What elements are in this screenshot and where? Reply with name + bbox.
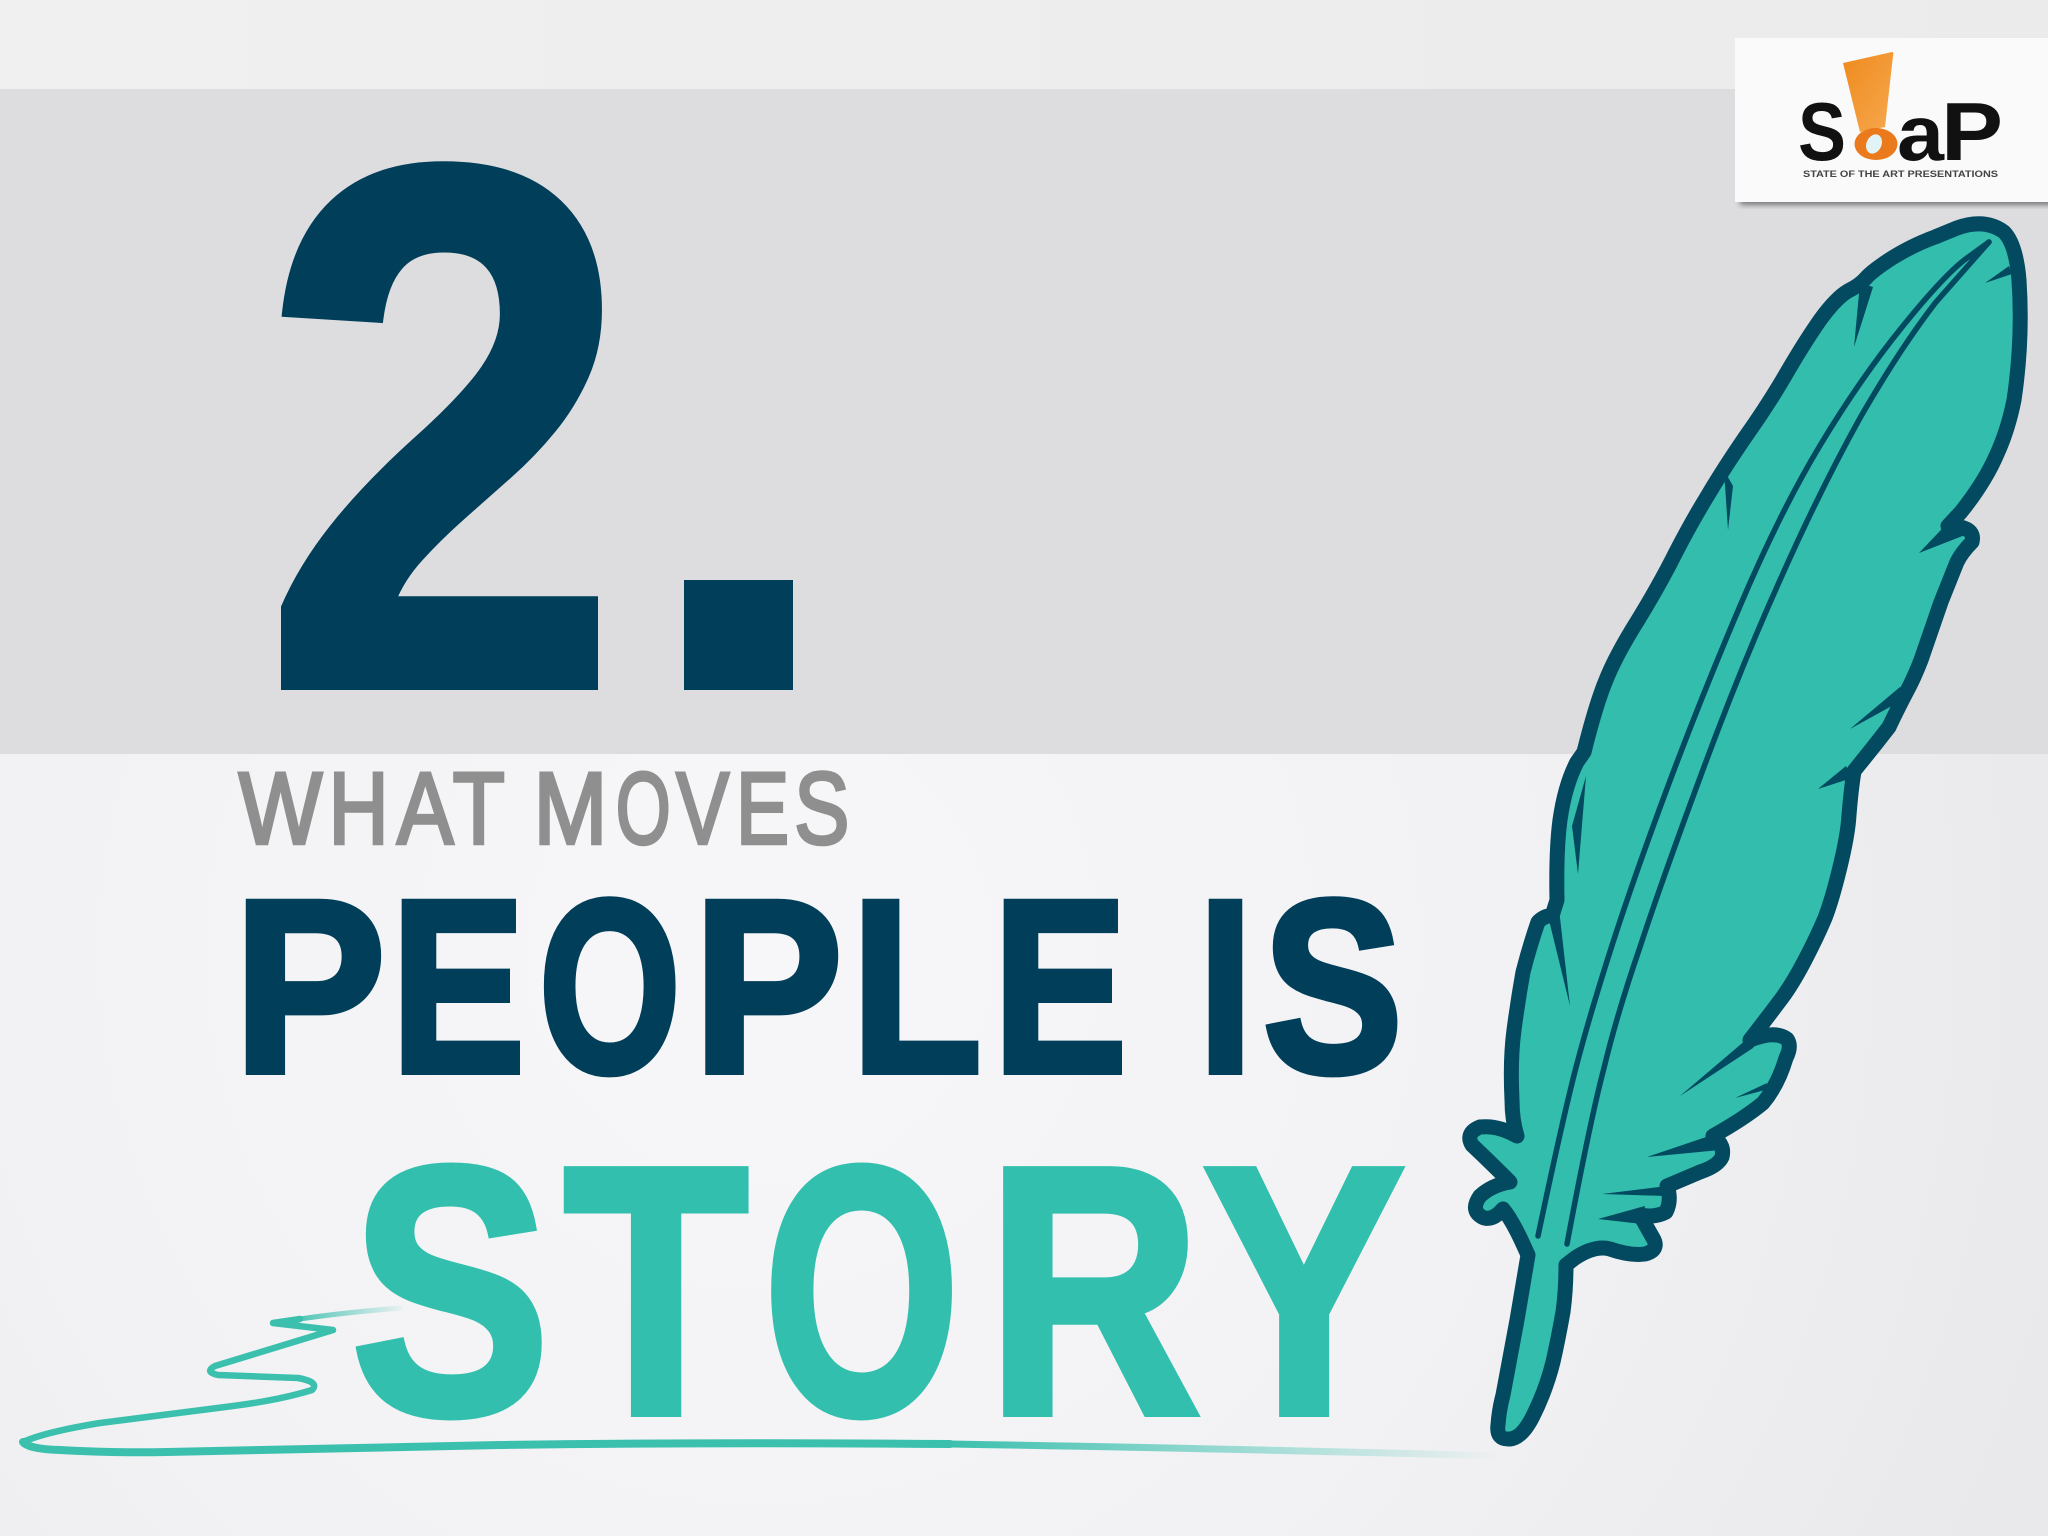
feather body outline xyxy=(1470,224,2020,1439)
heading: story: R xyxy=(987,1093,1201,1488)
heading: big number 2 xyxy=(260,12,793,843)
logo letter a: a xyxy=(1897,89,1945,177)
heading: what moves: W xyxy=(239,752,322,866)
heading: what moves: A xyxy=(397,752,454,866)
heading: what moves: T xyxy=(453,752,503,866)
heading: what moves: H xyxy=(329,752,389,866)
logo card shadow xyxy=(1740,197,2048,205)
heading: people is: E xyxy=(391,850,525,1124)
feather shaft lines xyxy=(1538,242,1989,1244)
heading: people is: O xyxy=(539,850,681,1124)
heading: people is: P xyxy=(234,850,386,1124)
heading: what moves: V xyxy=(676,752,729,866)
logo letter P: P xyxy=(1941,85,2003,178)
logo tagline: STATE OF THE ART PRESENTATIONS xyxy=(1803,169,1998,180)
pen stroke squiggle xyxy=(23,1308,1500,1456)
heading: big number 2: 2 xyxy=(260,12,631,843)
heading: what moves: S xyxy=(794,752,849,866)
logo orange ring xyxy=(1854,128,1898,160)
heading: story: Y xyxy=(1204,1093,1404,1488)
heading: story: S xyxy=(351,1093,550,1488)
icon: feather xyxy=(1470,224,2020,1439)
heading: people is: E xyxy=(993,850,1127,1124)
heading: number period xyxy=(684,580,793,690)
heading: story: T xyxy=(564,1093,748,1488)
logo letter S: S xyxy=(1798,85,1846,178)
heading: people is: I xyxy=(1198,850,1252,1124)
heading: story: O xyxy=(764,1093,960,1488)
feather barb notches xyxy=(1548,266,2012,1224)
logo card xyxy=(1735,38,2048,205)
logo card face xyxy=(1735,38,2048,202)
background: top strip xyxy=(0,0,2048,89)
heading: what moves: E xyxy=(736,752,789,866)
heading: what moves: M xyxy=(534,752,607,866)
panel: grey band behind number xyxy=(0,89,2048,754)
heading: what moves: O xyxy=(616,752,671,866)
heading: people is: L xyxy=(851,850,982,1124)
heading: people is: P xyxy=(694,850,843,1124)
logo exclamation mark xyxy=(1843,52,1893,132)
heading: people is: S xyxy=(1263,850,1403,1124)
